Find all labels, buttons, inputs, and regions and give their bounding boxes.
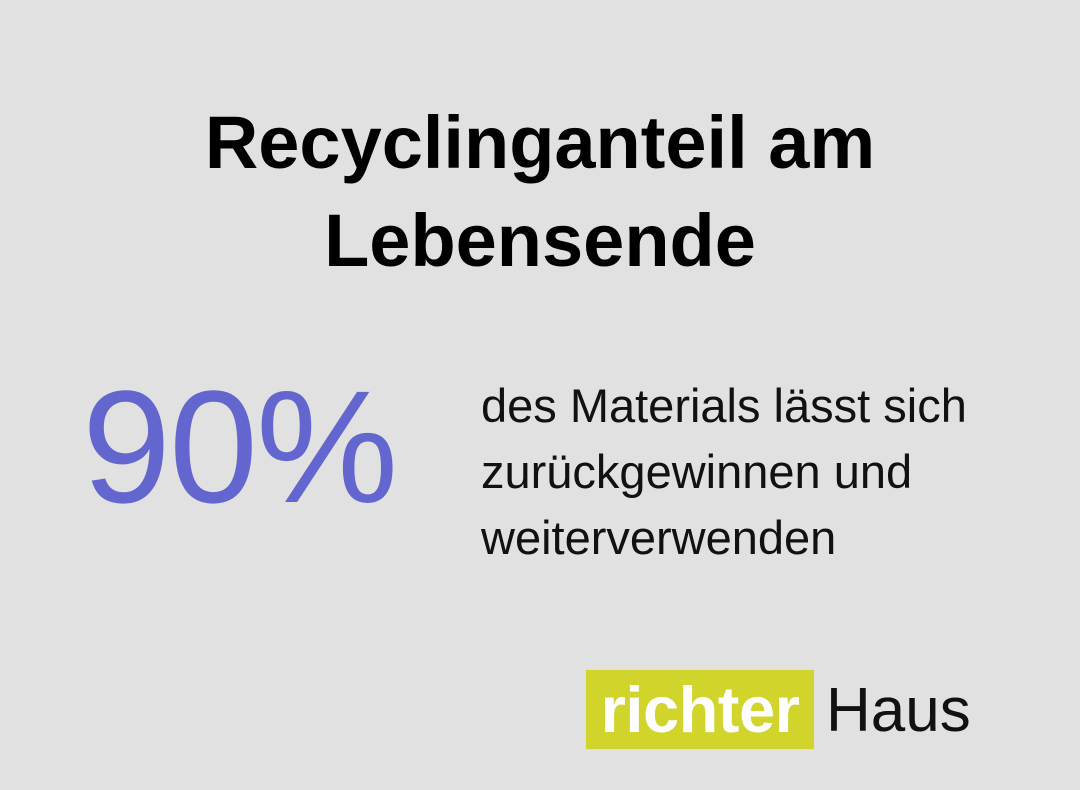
title: Recyclinganteil am (205, 101, 875, 184)
description text (481, 379, 967, 564)
logo: richter box: richter (601, 673, 799, 746)
title: Lebensende (324, 199, 756, 282)
description text: weiterverwenden (481, 511, 836, 564)
description text: zurückgewinnen und (481, 445, 912, 498)
logo: Haus: Haus (826, 676, 971, 745)
logo (586, 670, 971, 749)
big number: 90% (82, 357, 396, 536)
description text: des Materials lässt sich (481, 379, 967, 432)
title (205, 101, 875, 282)
